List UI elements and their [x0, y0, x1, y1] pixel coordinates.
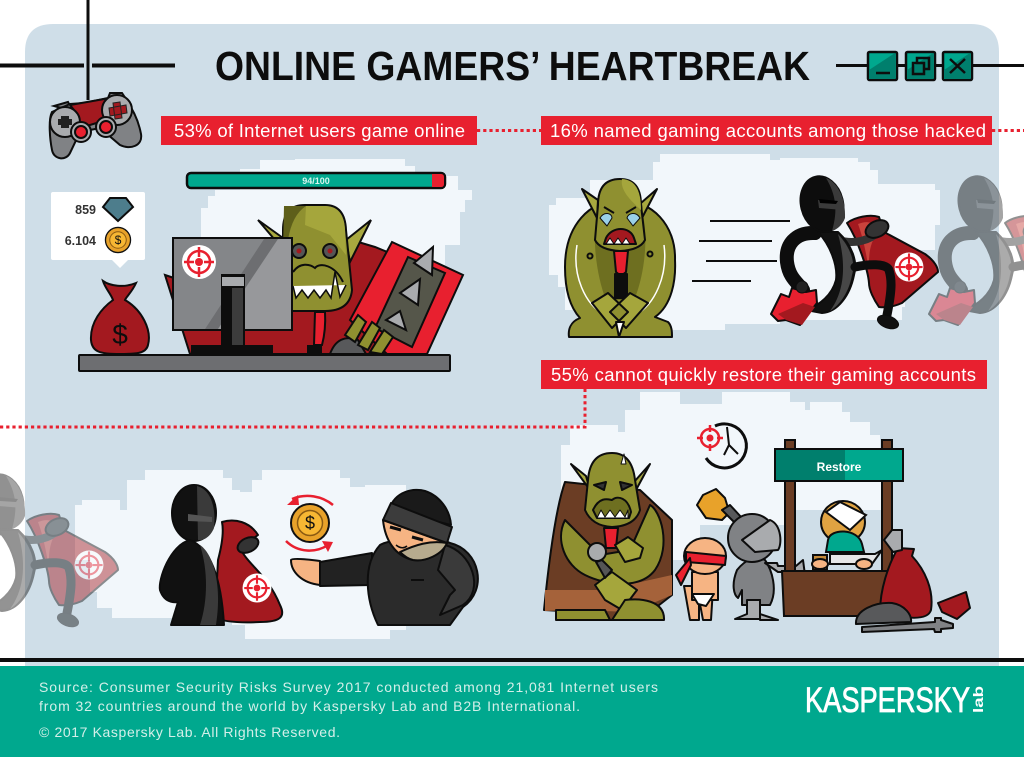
- title: ONLINE GAMERS’ HEARTBREAK: [215, 44, 810, 89]
- baby hero: [676, 538, 726, 620]
- restore stall: Restore: [817, 460, 862, 474]
- icon: game controller on cable: [50, 0, 141, 158]
- scene: sad orc and thief: [565, 172, 1024, 337]
- scene: restore queue: [544, 424, 970, 632]
- discarded bag and armour: [856, 530, 970, 632]
- scene: thief sells account: [0, 470, 478, 629]
- label: 16%: 16% named gaming accounts among those hacked: [550, 120, 986, 141]
- title rule left: [0, 64, 175, 68]
- source text: from 32 countries around the world by Kaspersky Lab and B2B International.: [39, 698, 580, 714]
- speed lines: [692, 221, 790, 281]
- resource bubble: 859: [75, 203, 96, 217]
- tie: [314, 312, 325, 345]
- footer band: [0, 666, 1024, 757]
- running thief: [771, 172, 938, 331]
- source text: [39, 679, 658, 740]
- ghost thief left: [0, 470, 118, 629]
- label: 53%: 53% of Internet users game online: [174, 120, 465, 141]
- orc head: [258, 205, 371, 311]
- label: 55%: 55% cannot quickly restore their gaming accounts: [551, 364, 976, 385]
- health bar: 94/100: [302, 176, 330, 186]
- label: 55%: [541, 360, 987, 389]
- buyer thief: [291, 490, 478, 625]
- label: 53%: [161, 116, 477, 145]
- money bag: [91, 281, 149, 354]
- coin with arrows: [286, 495, 333, 552]
- clock with target: [697, 424, 746, 468]
- worried orc: [544, 453, 672, 620]
- crying orc: [565, 179, 675, 337]
- source text: © 2017 Kaspersky Lab. All Rights Reserved.: [39, 724, 340, 740]
- restore stall: [775, 440, 903, 616]
- money bag: $: [112, 319, 128, 350]
- resource bubble: [51, 192, 145, 268]
- ghost thief right: [929, 172, 1024, 331]
- source text: Source: Consumer Security Risks Survey 2017 conducted among 21,081 Internet users: [39, 679, 658, 695]
- armour: [165, 238, 395, 354]
- thief with bag: [160, 485, 282, 625]
- dotted connector lines: [0, 130, 1024, 427]
- desk: [79, 355, 450, 371]
- health bar: [187, 173, 445, 188]
- window control buttons: [836, 52, 1024, 80]
- logo: KASPERSKY: [805, 681, 970, 720]
- resource bubble: 6.104: [65, 234, 96, 248]
- spiked shield: [330, 242, 463, 354]
- knight: [697, 489, 805, 620]
- logo: lab: [970, 686, 986, 713]
- footer rule: [0, 658, 1024, 662]
- monitor: [173, 238, 292, 354]
- scene: gamer orc at desk: [51, 173, 463, 371]
- pixel clouds: [75, 154, 940, 639]
